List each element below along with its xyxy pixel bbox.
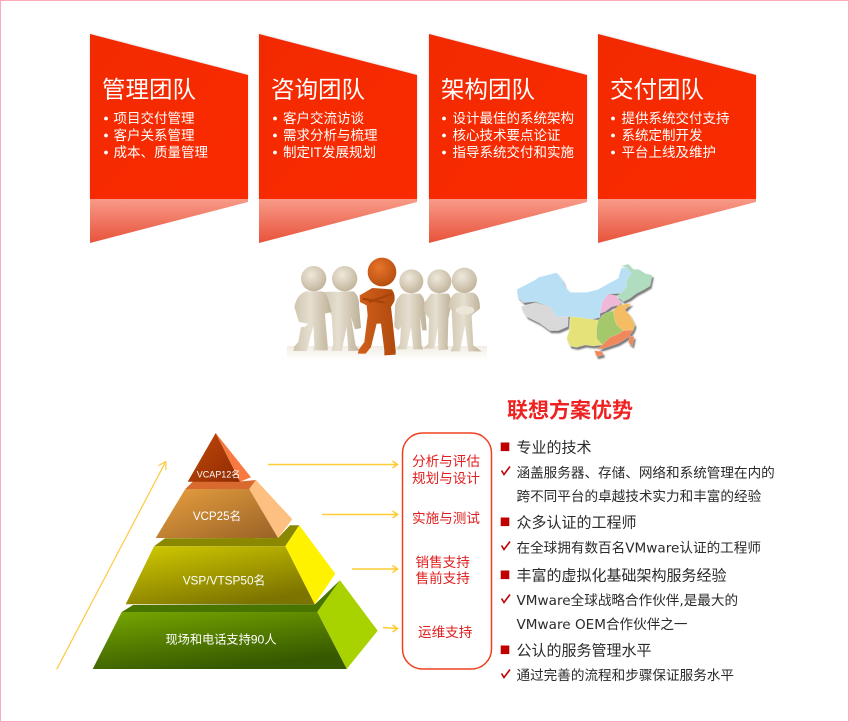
panel: 管理团队: 项目交付管理	[114, 110, 195, 126]
panel: 管理团队: 管理团队	[102, 76, 196, 102]
list: 专业的技术: 涵盖服务器、存储、网络和系统管理在内的	[516, 466, 775, 482]
panel: 咨询团队: 客户交流访谈	[283, 110, 364, 126]
tier 3: VSP/VTSP50名	[126, 525, 335, 604]
list: 专业的技术: 专业的技术	[516, 440, 592, 456]
panel: 咨询团队	[259, 34, 417, 243]
panel: service roles box: 销售支持	[416, 555, 470, 570]
list: 丰富的虚拟化基础架构服务经验	[501, 566, 738, 633]
list: 丰富的虚拟化基础架构服务经验: VMware OEM合作伙伴之一	[516, 617, 688, 633]
tier 2: VCP25名	[156, 480, 292, 538]
panel: 咨询团队: 咨询团队	[271, 76, 365, 102]
panel: service roles box: 售前支持	[416, 570, 470, 586]
list: 众多认证的工程师: 在全球拥有数百名VMware认证的工程师	[516, 540, 761, 556]
panel: 管理团队: 客户关系管理	[114, 127, 195, 143]
list: 专业的技术	[501, 440, 775, 505]
tier 1: VCAP12名: VCAP12名	[197, 468, 240, 480]
panel: 交付团队: 交付团队	[610, 76, 704, 102]
list: 众多认证的工程师: 众多认证的工程师	[516, 514, 637, 532]
chart: certification pyramid	[93, 433, 378, 669]
list: 丰富的虚拟化基础架构服务经验: 丰富的虚拟化基础架构服务经验	[516, 566, 727, 584]
panel: 交付团队: 提供系统交付支持	[622, 110, 730, 126]
panel: 咨询团队: 制定IT发展规划	[283, 145, 376, 160]
panel: service roles box	[402, 433, 492, 669]
arrow: rising level	[57, 462, 166, 669]
panel: service roles box: 规划与设计	[412, 471, 480, 486]
tier 4: 现场和电话支持90人	[93, 580, 378, 669]
tier 1: VCAP12名	[188, 433, 251, 482]
panel: 架构团队: 核心技术要点论证	[452, 128, 560, 143]
panel: 交付团队: 平台上线及维护	[622, 145, 716, 160]
list: 专业的技术: 跨不同平台的卓越技术实力和丰富的经验	[516, 488, 762, 505]
title: 联想方案优势: 联想方案优势	[507, 398, 633, 422]
panel: service roles box: 运维支持	[418, 625, 473, 640]
panel: 管理团队: 成本、质量管理	[114, 145, 208, 160]
panel: 交付团队	[598, 34, 756, 243]
list: 众多认证的工程师	[501, 514, 761, 556]
panel: service roles box: 分析与评估	[412, 454, 480, 469]
connector arrows	[268, 461, 398, 632]
panel: 架构团队	[429, 34, 587, 243]
panel: 管理团队	[90, 34, 248, 243]
panel: 架构团队: 架构团队	[441, 76, 535, 102]
list: 公认的服务管理水平: 公认的服务管理水平	[516, 642, 652, 660]
panel: 架构团队: 指导系统交付和实施	[452, 144, 574, 160]
tier 3: VSP/VTSP50名: VSP/VTSP50名	[183, 574, 265, 588]
panel: 咨询团队: 需求分析与梳理	[283, 128, 378, 143]
panel: 架构团队: 设计最佳的系统架构	[452, 111, 574, 126]
illustration: map of China	[517, 264, 652, 357]
illustration: team of figures	[287, 258, 487, 360]
tier 4: 现场和电话支持90人: 现场和电话支持90人	[165, 632, 277, 646]
list: 公认的服务管理水平	[501, 642, 734, 684]
list: 公认的服务管理水平: 通过完善的流程和步骤保证服务水平	[516, 668, 734, 684]
tier 2: VCP25名: VCP25名	[193, 509, 241, 523]
list: 丰富的虚拟化基础架构服务经验: VMware全球战略合作伙伴,是最大的	[516, 592, 738, 609]
panel: service roles box: 实施与测试	[412, 511, 480, 526]
panel: 交付团队: 系统定制开发	[622, 128, 703, 143]
